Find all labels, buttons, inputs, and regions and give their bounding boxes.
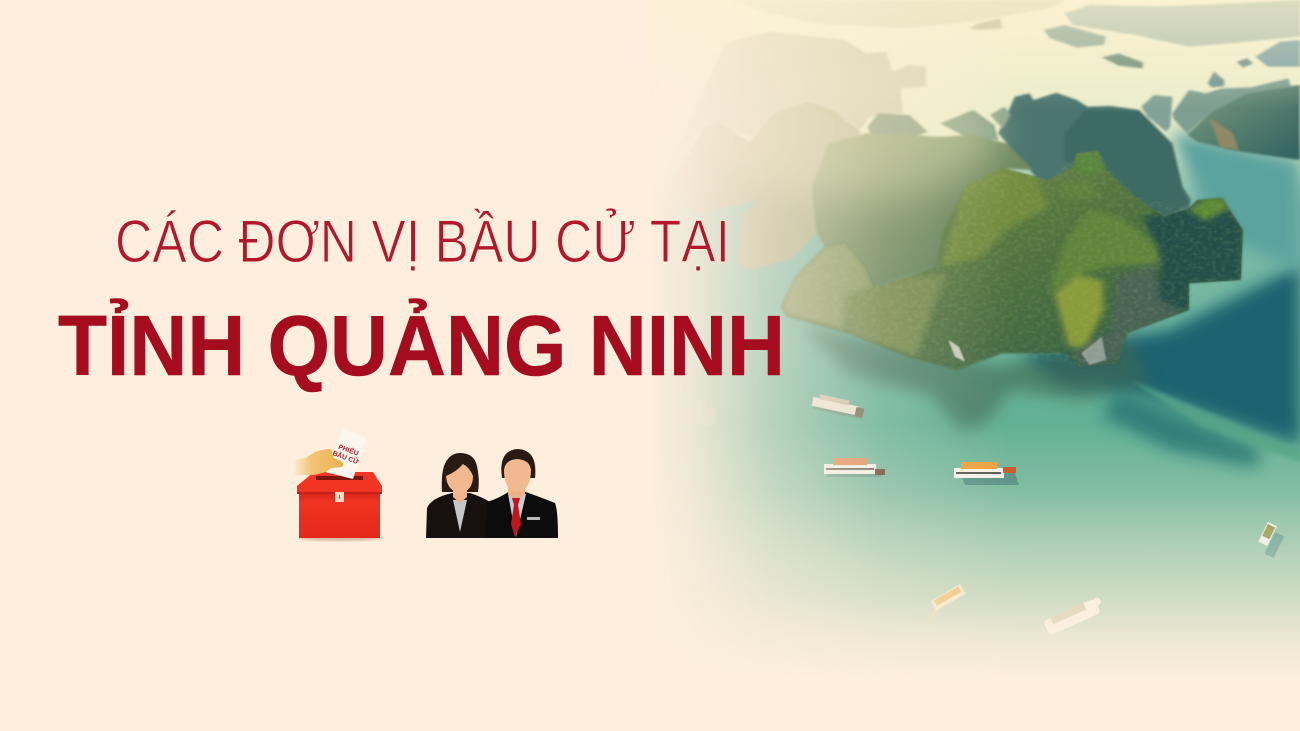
neck [508, 484, 525, 501]
hair [501, 449, 535, 478]
islands scaled group [671, 0, 1300, 370]
box slot [316, 476, 363, 480]
boat 5 [922, 584, 966, 625]
face [504, 459, 531, 492]
fade overlays [650, 0, 987, 658]
title line 2: TỈNH QUẢNG NINH [58, 298, 785, 394]
far right island [1141, 78, 1300, 160]
jacket [426, 493, 490, 538]
faded left island [702, 102, 861, 270]
tie [511, 498, 521, 537]
woman [426, 453, 490, 538]
neck [453, 486, 467, 503]
hand [293, 449, 343, 475]
ballot paper [325, 428, 367, 479]
man [485, 449, 558, 538]
jacket [485, 491, 558, 538]
icon: ballot box with hand [293, 428, 382, 541]
vegetation texture [867, 152, 1242, 368]
boat 4 [1258, 522, 1284, 558]
faded boat near heading [715, 414, 716, 417]
icon: two delegates [426, 449, 558, 538]
pocket square [527, 517, 540, 520]
boat 2 [824, 458, 885, 477]
back islands [868, 93, 1191, 220]
ballot text: BẦU CỬ [331, 447, 361, 466]
box shadow [298, 535, 382, 541]
hair [442, 453, 479, 492]
reflected shadow band [1100, 390, 1262, 468]
box clasp [335, 492, 344, 502]
blouse [453, 500, 467, 532]
rock face highlights [949, 340, 965, 362]
boat 1 [811, 393, 865, 420]
front island [781, 151, 1243, 370]
ballot text: PHIẾU [337, 441, 360, 458]
distant islands [737, 0, 1300, 134]
shirt [508, 494, 526, 537]
boat 3 [954, 462, 1019, 485]
title line 1: CÁC ĐƠN VỊ BẦU CỬ TẠI [115, 208, 730, 275]
soft sun haze over the islands [700, 60, 1000, 200]
water shadow under islands [800, 325, 1150, 430]
photo: Ha Long Bay aerial view [650, 0, 1300, 685]
upper right channel [1170, 130, 1300, 270]
box lid [297, 472, 382, 493]
front island shading [783, 152, 1243, 366]
face [446, 464, 473, 493]
sand streak [1130, 380, 1300, 462]
deep water area [1020, 265, 1300, 445]
boats [688, 393, 1287, 636]
box body [299, 493, 380, 538]
boat 6 [1044, 598, 1101, 634]
water [650, 0, 1300, 684]
middle island [812, 133, 1034, 287]
ballot text [331, 440, 364, 466]
